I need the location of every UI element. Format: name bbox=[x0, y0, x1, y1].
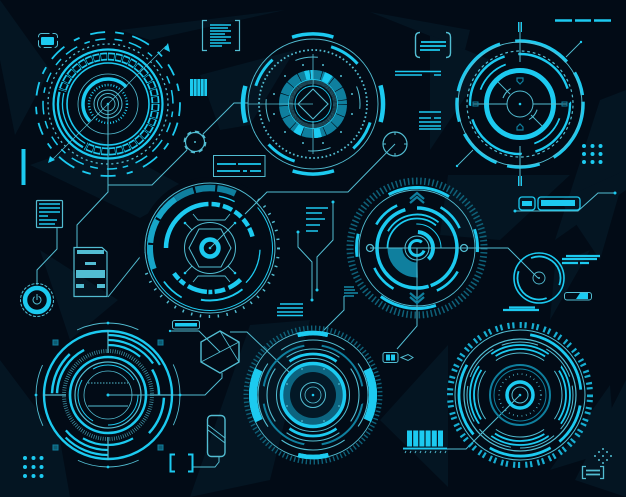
concentric dial: bottom centre bbox=[233, 315, 393, 475]
platform bars bbox=[503, 308, 539, 310]
small gauge with ring bbox=[511, 250, 567, 306]
screen icon: top left bbox=[38, 34, 58, 48]
bracket label: bottom right bbox=[582, 466, 604, 478]
small toggle icon bbox=[383, 352, 413, 362]
striped square bbox=[190, 79, 207, 96]
line label bbox=[395, 72, 441, 75]
bracket label: top centre bbox=[416, 32, 450, 58]
connector lines bbox=[37, 103, 616, 467]
tick dial: centre right bbox=[335, 166, 507, 330]
text lines: top centre bbox=[419, 112, 441, 129]
radar dial: top left bbox=[16, 12, 200, 196]
crosshair dial: top right bbox=[449, 22, 591, 186]
battery icon bbox=[564, 292, 592, 300]
dot grid: bottom left bbox=[23, 456, 44, 478]
vertical bar bbox=[22, 149, 26, 185]
small list label bbox=[344, 287, 358, 296]
bar chart bbox=[403, 430, 447, 453]
power button icon bbox=[20, 284, 54, 316]
pill label: lower left bbox=[172, 320, 200, 329]
gear node bbox=[184, 132, 206, 152]
target dial: top centre bbox=[226, 17, 400, 191]
tooth dial: bottom right bbox=[449, 324, 591, 466]
diamond dot pattern bbox=[594, 448, 612, 464]
blank arc of the cell ring, left side bbox=[44, 40, 172, 168]
text lines: centre column bbox=[306, 208, 328, 231]
radial meter: bottom left bbox=[12, 299, 204, 491]
dot grid: right bbox=[582, 144, 602, 164]
hexagon icon bbox=[201, 331, 239, 373]
text box: centre bbox=[214, 156, 265, 176]
capacity bars: right bbox=[562, 256, 600, 263]
text lines: lower centre bbox=[277, 304, 303, 316]
segmented dial: centre left bbox=[122, 160, 298, 336]
reticle node bbox=[383, 132, 407, 156]
document icon bbox=[74, 248, 107, 296]
corner brackets bbox=[170, 454, 192, 472]
pill buttons: right bbox=[519, 197, 580, 210]
small document: left bbox=[36, 200, 62, 228]
rounded capsule bbox=[208, 416, 225, 456]
document bracket: top bbox=[202, 20, 240, 50]
dashes: top right bbox=[555, 19, 611, 22]
